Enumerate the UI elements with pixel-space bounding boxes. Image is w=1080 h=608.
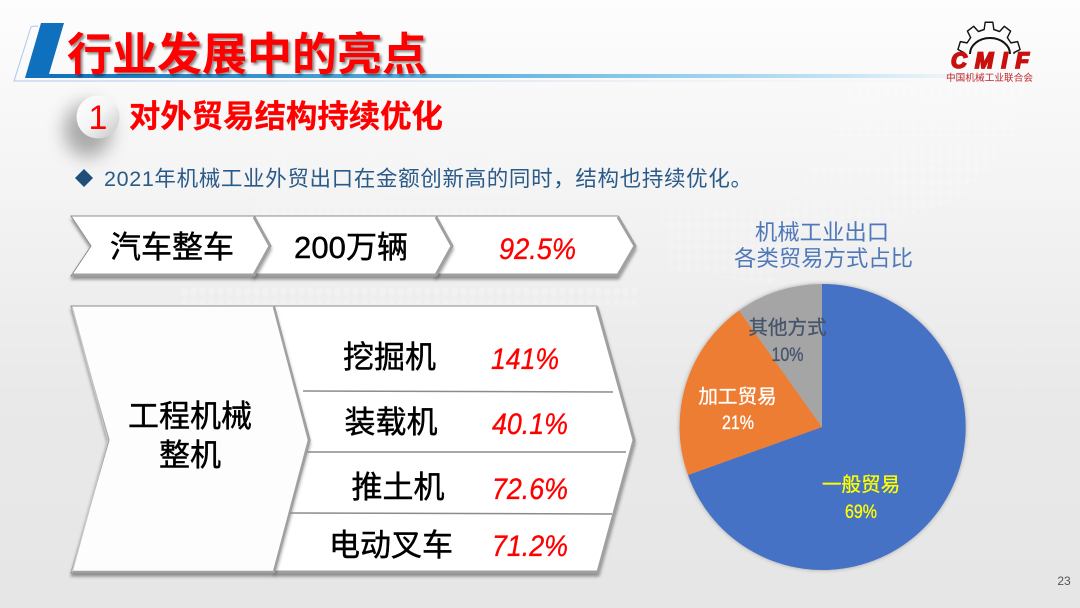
- chevron: 200万辆: [253, 216, 453, 276]
- badge number: 1: [89, 99, 107, 137]
- label: 200万辆: 200万辆: [294, 230, 408, 265]
- row: 电动叉车: 电动叉车: [329, 528, 453, 563]
- number badge: [64, 96, 120, 157]
- label: 工程机械整机: 工程机械: [128, 399, 252, 434]
- row: 推土机: [352, 470, 568, 506]
- chart title: 机械工业出口: [755, 220, 889, 245]
- icon: diamond bullet: [75, 169, 93, 187]
- chart title: 各类贸易方式占比: [734, 246, 913, 271]
- row: 挖掘机: 挖掘机: [343, 340, 436, 375]
- label: 加工贸易: 加工贸易: [698, 386, 777, 408]
- page number: 23: [1057, 574, 1071, 588]
- row: 电动叉车: [329, 528, 568, 563]
- label: 一般贸易: 一般贸易: [822, 474, 900, 496]
- row: 推土机: 72.6%: [492, 473, 568, 506]
- value: 92.5%: 92.5%: [499, 233, 576, 266]
- section heading: 对外贸易结构持续优化: [129, 99, 443, 134]
- header band: [14, 23, 1047, 81]
- label: 加工贸易: 21%: [722, 413, 754, 434]
- title: 行业发展中的亮点: [67, 29, 427, 80]
- label: 一般贸易: [822, 474, 900, 523]
- panel: construction machinery chevrons: [71, 306, 635, 573]
- gear outline: [958, 22, 1020, 54]
- row divider: [307, 451, 626, 453]
- chevron: rows: [274, 306, 635, 573]
- header blue slant block: [25, 23, 64, 78]
- label: 加工贸易: [698, 386, 777, 434]
- chart title: [734, 220, 913, 271]
- logo: CMIF: [946, 22, 1033, 84]
- label: 其他方式: [748, 317, 827, 366]
- label: 一般贸易: 69%: [845, 502, 877, 523]
- faint world map pattern: [180, 85, 1025, 305]
- label: 汽车整车: 汽车整车: [110, 230, 234, 265]
- chevron: 工程机械整机: [71, 306, 310, 573]
- row: 推土机: 推土机: [352, 470, 444, 505]
- badge shadow: [64, 103, 112, 157]
- label: 其他方式: 其他方式: [748, 317, 827, 339]
- bullet statement: [75, 167, 752, 191]
- row: 装载机: [344, 405, 568, 441]
- header outline: [14, 26, 1040, 81]
- row: 装载机: 装载机: [344, 405, 438, 440]
- label: 其他方式: 10%: [772, 345, 804, 366]
- chevron: 汽车整车: [71, 216, 271, 276]
- pie slices: [680, 284, 966, 570]
- row divider: [290, 513, 612, 514]
- label: 工程机械整机: [128, 399, 252, 473]
- chevron: 92.5%: [435, 216, 636, 276]
- row: 挖掘机: [343, 340, 559, 376]
- row: 电动叉车: 71.2%: [492, 530, 568, 563]
- panel: vehicle chevrons: [71, 216, 636, 276]
- badge circle: [76, 96, 120, 138]
- statement text: 2021年机械工业外贸出口在金额创新高的同时，结构也持续优化。: [104, 167, 752, 191]
- label: 工程机械整机: 整机: [159, 438, 221, 473]
- row: 装载机: 40.1%: [492, 408, 568, 441]
- pie chart: [680, 284, 966, 570]
- CMIF wordmark: CMIF: [951, 48, 1030, 73]
- row divider: [303, 391, 613, 392]
- gear inner arc: [970, 38, 1010, 54]
- row: 挖掘机: 141%: [491, 343, 559, 376]
- header underline bar: [47, 74, 1047, 78]
- logo caption: 中国机械工业联合会: [946, 72, 1033, 84]
